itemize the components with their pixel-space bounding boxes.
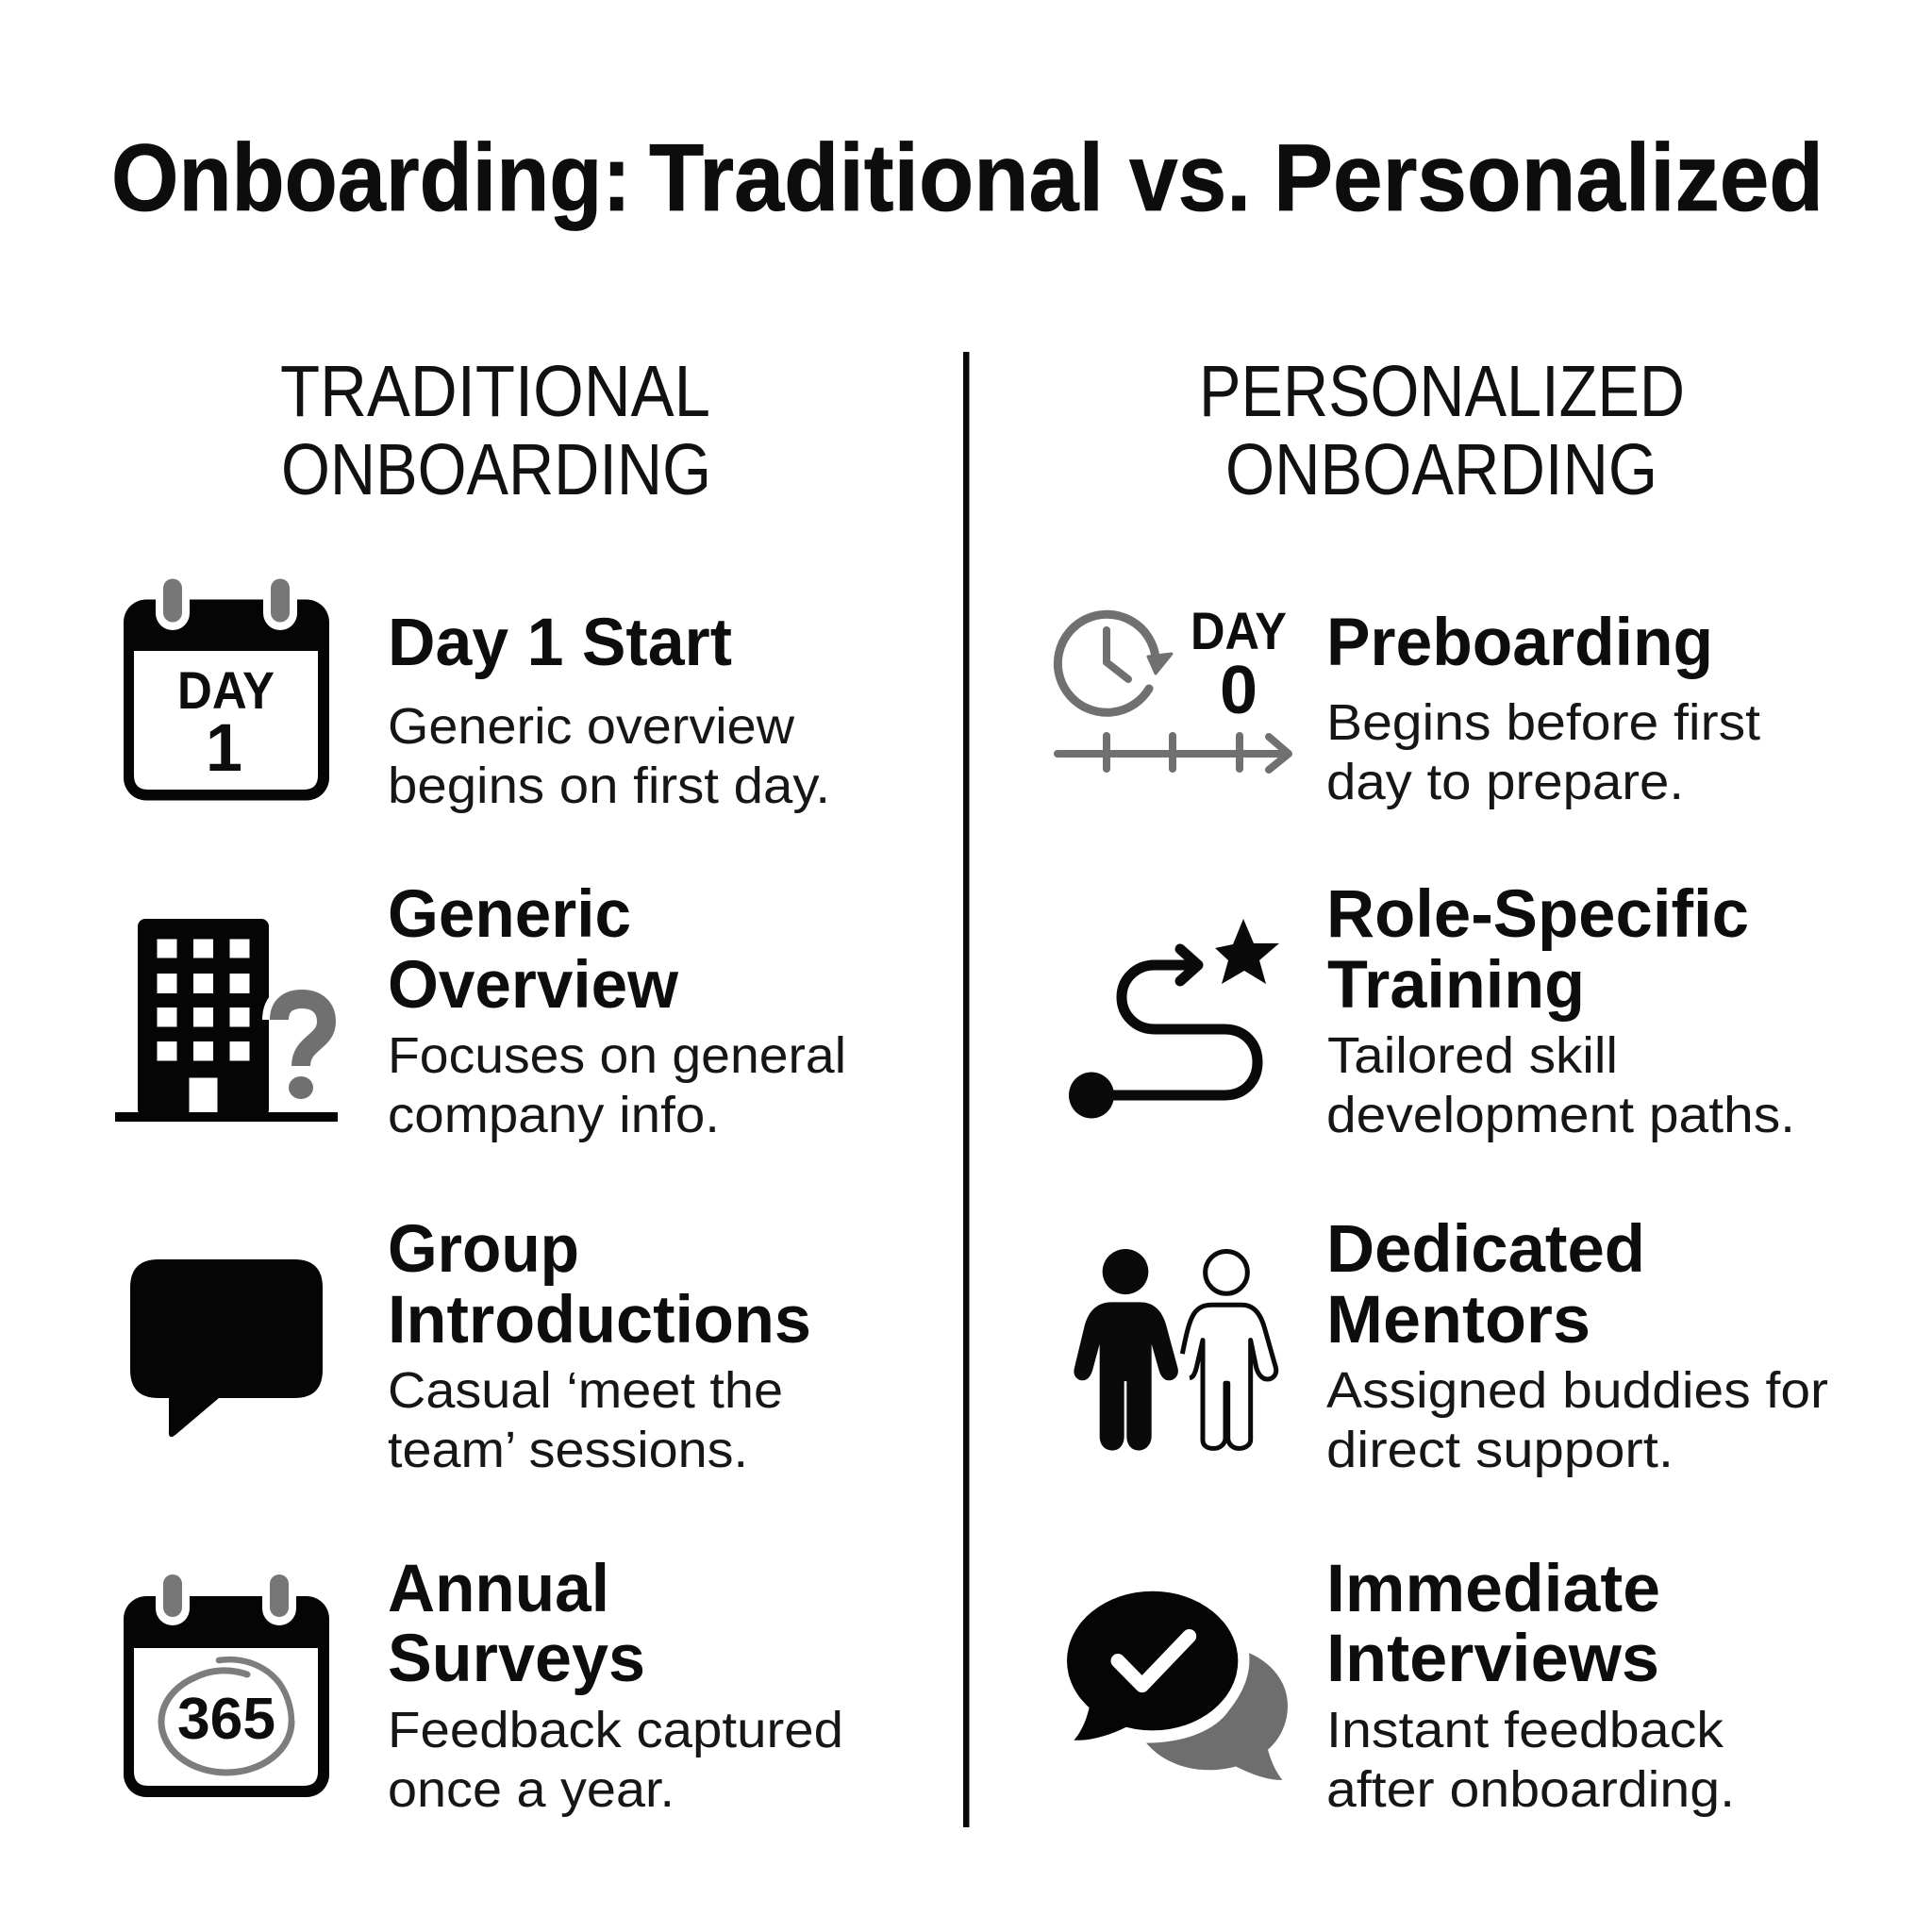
heading: Immediate Interviews: [1326, 1552, 1660, 1696]
heading: Day 1 Start: Day 1 Start: [388, 606, 732, 680]
description: Dedicated Mentors: Assigned buddies for: [1326, 1362, 1828, 1419]
icon: clock with day 0 timeline: DAY: [1191, 601, 1287, 660]
icon: 365 calendar: 365: [177, 1687, 275, 1752]
heading: Generic Overview: Generic: [388, 877, 631, 952]
icon: day 1 calendar: [124, 566, 329, 800]
heading: Generic Overview: [388, 877, 679, 1023]
description: Group Introductions: [388, 1362, 783, 1478]
title: Onboarding:: [111, 125, 631, 231]
title: [111, 125, 1824, 231]
column heading: personalized: [1199, 351, 1685, 510]
heading: Preboarding: Preboarding: [1326, 606, 1713, 680]
column heading: traditional: ONBOARDING: [281, 429, 711, 510]
heading: Dedicated Mentors: [1326, 1212, 1645, 1357]
description: Annual Surveys: [388, 1702, 843, 1818]
description: Generic Overview: company info.: [388, 1087, 720, 1143]
description: Generic Overview: [388, 1027, 846, 1143]
heading: Immediate Interviews: Immediate: [1326, 1552, 1660, 1626]
description: Annual Surveys: once a year.: [388, 1761, 675, 1818]
icon: speech bubbles with check mark: [1067, 1591, 1288, 1780]
item: Generic Overview: [115, 877, 846, 1143]
description: Day 1 Start: [388, 698, 830, 814]
heading: Immediate Interviews: Interviews: [1326, 1622, 1659, 1696]
item: Dedicated Mentors: [1074, 1212, 1828, 1478]
panel: traditional onboarding: [115, 351, 846, 1818]
item: Annual Surveys: [124, 1552, 843, 1818]
title: vs.: [1129, 125, 1251, 231]
item: Immediate Interviews: [1067, 1552, 1735, 1818]
description: Group Introductions: Casual ‘meet the: [388, 1362, 783, 1419]
description: Preboarding: Begins before first: [1326, 694, 1760, 751]
center divider: [963, 352, 970, 1827]
heading: Group Introductions: Group: [388, 1212, 579, 1287]
icon: winding path to star: [1069, 919, 1279, 1119]
panel: personalized onboarding: [1058, 351, 1828, 1818]
description: Preboarding: day to prepare.: [1326, 754, 1684, 810]
item: Preboarding: [1058, 601, 1760, 810]
description: Day 1 Start: Generic overview: [388, 698, 795, 755]
description: Generic Overview: Focuses on general: [388, 1027, 846, 1084]
heading: Generic Overview: Overview: [388, 948, 679, 1023]
column heading: traditional: TRADITIONAL: [280, 351, 710, 432]
description: Group Introductions: team’ sessions.: [388, 1422, 748, 1478]
description: Preboarding: [1326, 694, 1760, 810]
icon: day 1 calendar: 1: [206, 711, 242, 786]
item: Role-Specific Training: [1069, 877, 1795, 1143]
column heading: personalized: ONBOARDING: [1225, 429, 1657, 510]
heading: Annual Surveys: Surveys: [388, 1622, 645, 1696]
description: Immediate Interviews: after onboarding.: [1326, 1761, 1735, 1818]
item: Group Introductions: [130, 1212, 811, 1478]
heading: Role-Specific Training: [1326, 877, 1749, 1023]
icon: 365 calendar: [124, 1563, 329, 1797]
icon: day 1 calendar: DAY: [177, 660, 275, 720]
heading: Annual Surveys: Annual: [388, 1552, 609, 1626]
icon: clock with day 0 timeline: 0: [1220, 653, 1257, 728]
description: Immediate Interviews: Instant feedback: [1326, 1702, 1724, 1758]
description: Day 1 Start: begins on first day.: [388, 758, 830, 814]
heading: Annual Surveys: [388, 1552, 645, 1696]
heading: Group Introductions: Introductions: [388, 1283, 811, 1357]
description: Role-Specific Training: development paths.: [1326, 1087, 1795, 1143]
heading: Role-Specific Training: Role-Specific: [1326, 877, 1749, 952]
heading: Role-Specific Training: Training: [1327, 948, 1585, 1023]
heading: Dedicated Mentors: Dedicated: [1326, 1212, 1645, 1287]
heading: Group Introductions: [388, 1212, 811, 1357]
column heading: traditional: [280, 351, 711, 510]
icon: speech bubble: [130, 1259, 323, 1437]
description: Dedicated Mentors: direct support.: [1326, 1422, 1674, 1478]
description: Immediate Interviews: [1326, 1702, 1735, 1818]
icon: mentor and mentee figures: [1074, 1249, 1276, 1451]
title: Personalized: [1274, 125, 1824, 231]
description: Role-Specific Training: Tailored skill: [1327, 1027, 1618, 1084]
column heading: personalized: PERSONALIZED: [1199, 351, 1685, 432]
description: Annual Surveys: Feedback captured: [388, 1702, 843, 1758]
icon: office building with question mark: [115, 919, 338, 1122]
item: Day 1 Start: [124, 566, 830, 814]
description: Role-Specific Training: [1326, 1027, 1795, 1143]
title: Traditional: [649, 125, 1104, 231]
icon: clock with day 0 timeline: [1058, 601, 1289, 770]
description: Dedicated Mentors: [1326, 1362, 1828, 1478]
heading: Dedicated Mentors: Mentors: [1326, 1283, 1591, 1357]
